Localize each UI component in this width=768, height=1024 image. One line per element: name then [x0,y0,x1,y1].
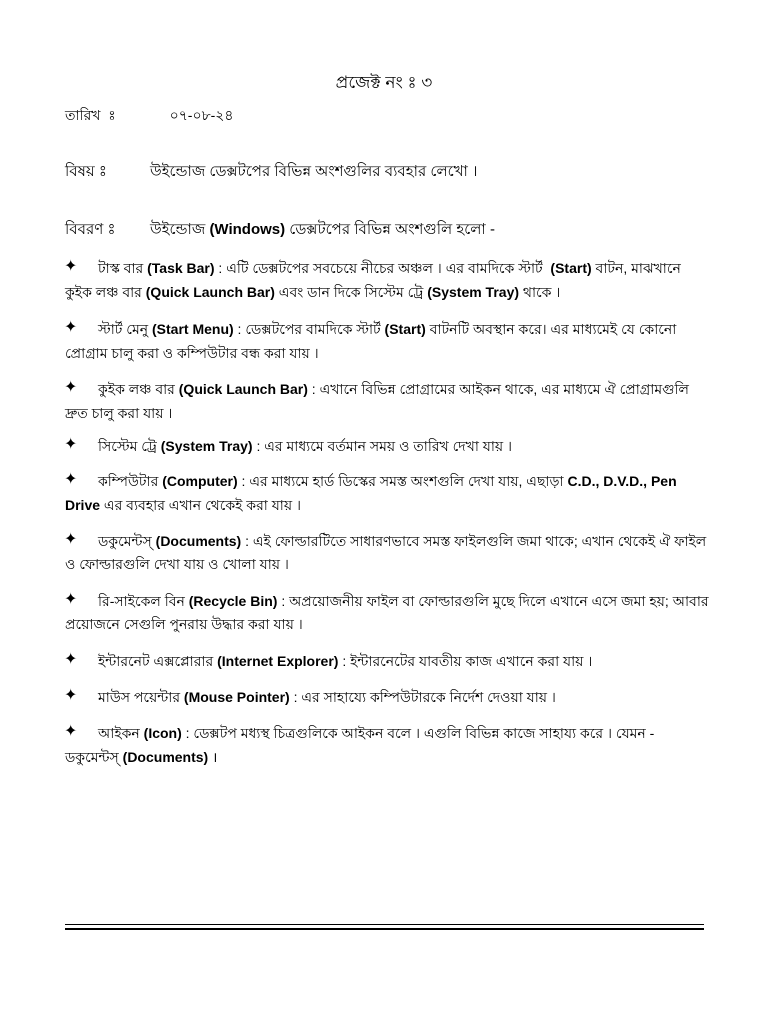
bullet: system tray: সিস্টেম ট্রে (System Tray) : এর মাধ্যমে বর্তমান সময় ও তারিখ দেখা যায় । [98,438,512,454]
subject line [64,162,477,180]
bullet: quick launch bar: দ্রুত চালু করা যায় । [65,405,172,421]
bullet: documents: ডকুমেন্টস্ (Documents) : এই ফোল্ডারটিতে সাধারণভাবে সমস্ত ফাইলগুলি জমা থাকে; এখান থেকেই ঐ ফাইল [98,533,706,549]
bullet: internet explorer: ইন্টারনেট এক্সপ্লোরার (Internet Explorer) : ইন্টারনেটের যাবতীয় কাজ এখানে করা যায় । [98,653,592,669]
bullet: computer: কম্পিউটার (Computer) : এর মাধ্যমে হার্ড ডিস্কের সমস্ত অংশগুলি দেখা যায়, এছাড়া C.D., D.V.D., Pen [98,473,677,489]
bullet: internet explorer: ✦ [64,651,77,668]
bullet: start menu: প্রোগ্রাম চালু করা ও কম্পিউটার বন্ধ করা যায় । [65,345,319,361]
title: প্রজেক্ট নং ঃ ৩ [336,73,432,92]
bullet: mouse pointer: ✦ [64,687,77,704]
bullet: task bar: ✦ [64,258,77,275]
text: উইন্ডোজ (Windows) ডেক্সটপের বিভিন্ন অংশগুলি হলো - [150,221,495,238]
bullet: start menu: স্টার্ট মেনু (Start Menu) : ডেক্সটপের বামদিকে স্টার্ট (Start) বাটনটি অবস্থান করে। এর মাধ্যমেই যে কোনো [98,321,676,337]
bullet: task bar: টাস্ক বার (Task Bar) : এটি ডেক্সটপের সবচেয়ে নীচের অঞ্চল । এর বামদিকে স্টার্ট (Start) বাটন, মাঝখানে [98,260,681,276]
bullet: quick launch bar: কুইক লঞ্চ বার (Quick Launch Bar) : এখানে বিভিন্ন প্রোগ্রামের আইকন থাকে, এর মাধ্যমে ঐ প্রোগ্রামগুলি [98,381,689,397]
bullet: icon: আইকন (Icon) : ডেক্সটপ মধ্যস্থ চিত্রগুলিকে আইকন বলে । এগুলি বিভিন্ন কাজে সাহায্য করে । যেমন - [98,725,654,741]
bullet: quick launch bar [64,379,690,422]
bullet: documents [64,531,706,572]
bullet: mouse pointer: মাউস পয়েন্টার (Mouse Pointer) : এর সাহায্যে কম্পিউটারকে নির্দেশ দেওয়া যায় । [98,689,556,705]
description line [64,220,495,238]
bullet: computer: Drive এর ব্যবহার এখান থেকেই করা যায় । [65,497,301,513]
bullet: recycle bin: ✦ [64,591,77,608]
bullet: quick launch bar: ✦ [64,379,77,396]
bullet: computer [64,471,677,513]
bullet: system tray: ✦ [64,436,77,453]
description line: বিবরণ ঃ [65,221,115,238]
bullet: icon [64,723,654,766]
bullet: task bar [64,258,682,300]
bullet: recycle bin: প্রয়োজনে সেগুলি পুনরায় উদ্ধার করা যায় । [65,616,303,632]
bullet: documents: ✦ [64,531,77,548]
bullet: recycle bin: রি-সাইকেল বিন (Recycle Bin) : অপ্রয়োজনীয় ফাইল বা ফোল্ডারগুলি মুছে দিলে এখানে এসে জমা হয়; আবার [98,593,709,609]
text: উইন্ডোজ ডেক্সটপের বিভিন্ন অংশগুলির ব্যবহার লেখো । [150,163,477,180]
bullet list [64,258,709,766]
bullet: recycle bin [64,591,709,632]
bullet: task bar: কুইক লঞ্চ বার (Quick Launch Bar) এবং ডান দিকে সিস্টেম ট্রে (System Tray) থাকে । [65,284,560,300]
bullet: start menu: ✦ [64,319,77,336]
subject line: বিষয় ঃ [65,163,107,180]
bullet: start menu [64,319,676,362]
bullet: icon: ডকুমেন্টস্ (Documents) । [65,749,217,765]
bullet: documents: ও ফোল্ডারগুলি দেখা যায় ও খোলা যায় । [65,556,289,572]
date line: তারিখ ঃ ০৭-০৮-২৪ [65,107,234,123]
bullet: computer: ✦ [64,471,77,488]
bullet: icon: ✦ [64,723,77,740]
